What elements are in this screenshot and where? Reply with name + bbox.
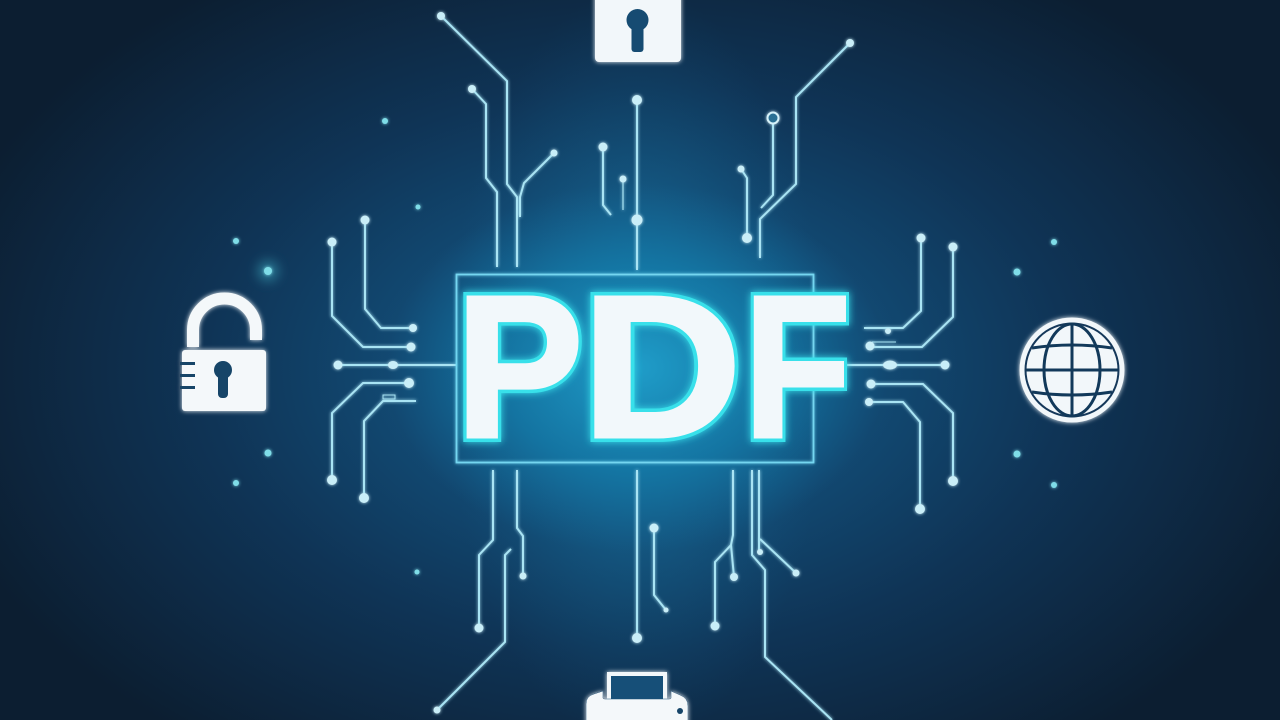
circuit traces: top — [437, 12, 854, 270]
PDF title: D — [582, 254, 742, 479]
central frame — [456, 274, 814, 462]
PDF title: P — [456, 254, 583, 480]
circuit traces: left — [327, 216, 456, 503]
circuit traces: right — [840, 234, 958, 514]
PDF title: D — [582, 254, 742, 479]
icon: printer — [586, 674, 688, 720]
PDF title — [456, 254, 851, 480]
PDF title: P — [456, 254, 583, 480]
icon: open padlock — [180, 299, 266, 411]
floating particles — [233, 118, 1057, 574]
icon: globe — [1022, 320, 1122, 420]
circuit traces: bottom — [434, 470, 832, 720]
PDF title: F — [744, 255, 851, 480]
icon: top padlock — [595, 0, 681, 62]
PDF title: F — [744, 255, 851, 480]
